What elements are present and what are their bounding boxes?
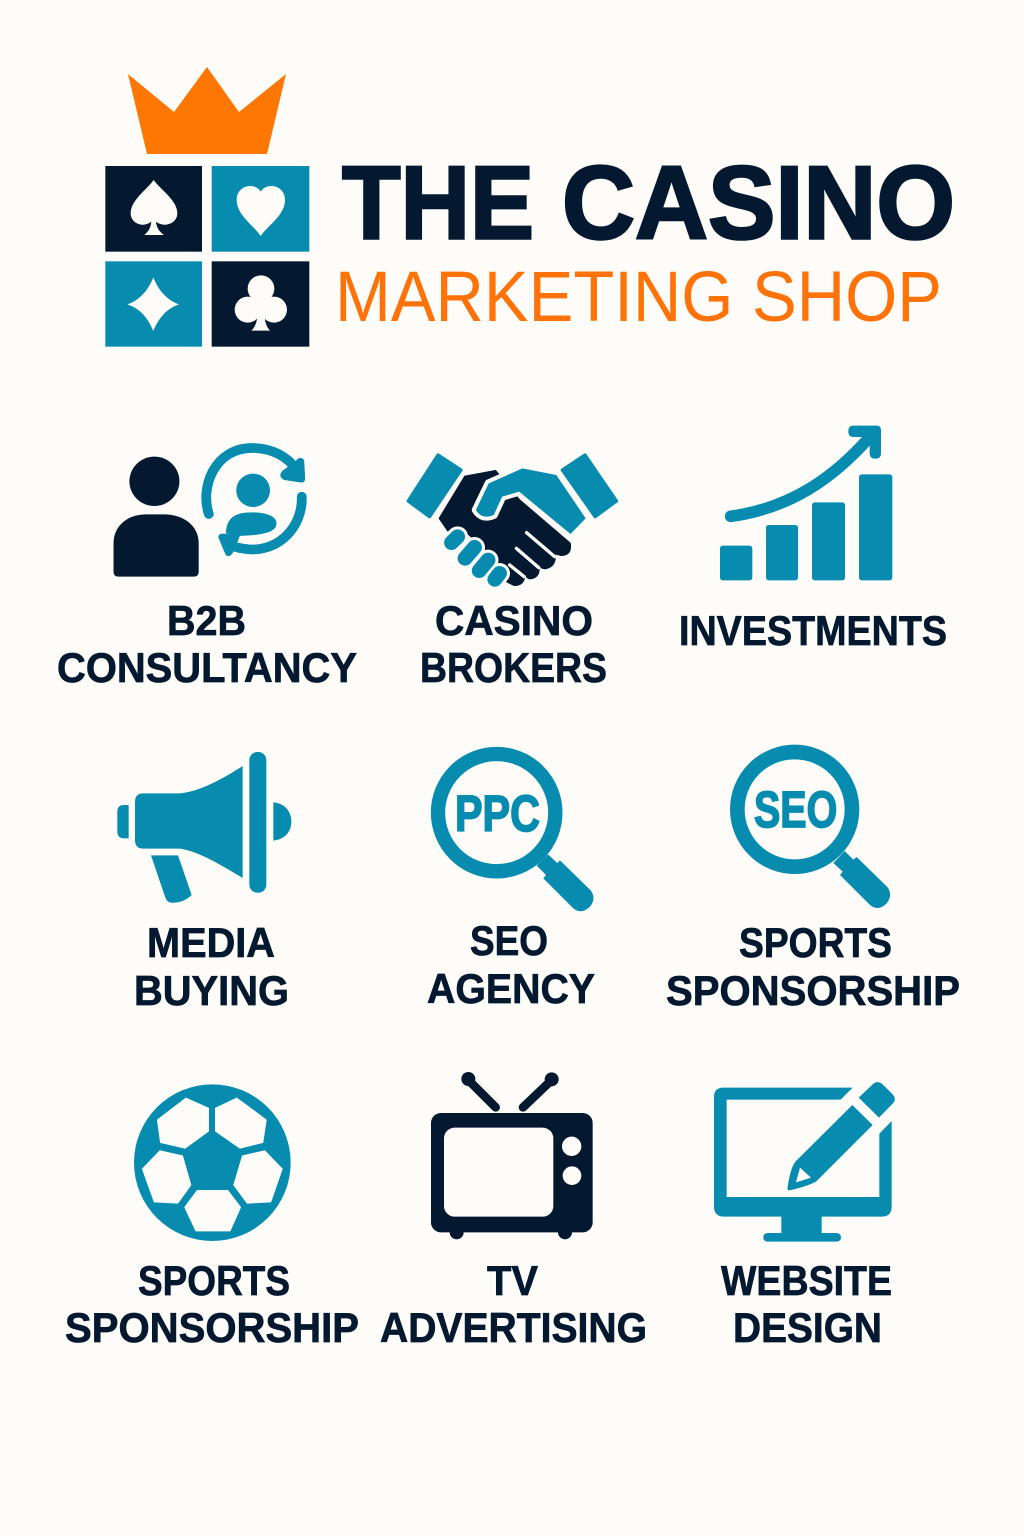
icon: diamond tile: [105, 261, 202, 347]
icon: crown: [128, 67, 286, 154]
panel: sports sponsorship (football): [65, 1084, 359, 1351]
label: MEDIA: [147, 919, 275, 966]
title: THE CASINO: [342, 146, 955, 262]
icon: heart tile: [212, 166, 309, 252]
label: BUYING: [134, 967, 289, 1014]
label: [420, 597, 607, 691]
label: WEBSITE: [721, 1257, 892, 1304]
label: [57, 597, 357, 691]
label: CASINO: [435, 597, 593, 644]
logo: crown and card suits: [105, 67, 309, 347]
subtitle: MARKETING SHOP: MARKETING SHOP: [335, 258, 942, 337]
label: SPONSORSHIP: [65, 1304, 359, 1351]
icon: magnifier SEO: [737, 752, 890, 908]
label: [721, 1257, 892, 1351]
panel: casino brokers: [408, 455, 616, 691]
label: [666, 919, 960, 1014]
icon: magnifier PPC: [438, 754, 594, 911]
icon: growth chart with arrow: [720, 426, 892, 580]
icon: retro television: [431, 1072, 593, 1239]
label: B2B: [167, 597, 246, 644]
label: BROKERS: [420, 644, 607, 691]
label: CONSULTANCY: [57, 644, 357, 691]
label: INVESTMENTS: [679, 607, 947, 654]
icon: person with rotating arrows: [114, 448, 305, 577]
label: [134, 919, 289, 1014]
panel: sports sponsorship (magnifier): [666, 752, 960, 1014]
icon: spade tile: [105, 166, 202, 252]
title: THE CASINO: CASINO: [562, 146, 955, 262]
panel: media buying: [117, 752, 291, 1014]
icon: club tile: [212, 261, 309, 347]
label: AGENCY: [427, 965, 595, 1012]
icon: monitor with pencil: [714, 1082, 895, 1242]
label: SEO: [470, 917, 548, 964]
panel: website design: [714, 1082, 895, 1351]
label: SPONSORSHIP: [666, 967, 960, 1014]
panel: B2B consultancy: [57, 448, 357, 691]
label: TV: [487, 1257, 538, 1304]
label: SPORTS: [739, 919, 892, 966]
panel: TV advertising: [380, 1072, 647, 1351]
icon: magnifier SEO: SEO: [754, 781, 837, 838]
title: THE CASINO: THE: [342, 146, 534, 262]
icon: magnifier PPC: PPC: [455, 785, 540, 842]
label: ADVERTISING: [380, 1304, 647, 1351]
icon: soccer ball: [134, 1084, 291, 1241]
icon: megaphone: [117, 752, 291, 903]
label: [65, 1257, 359, 1351]
label: DESIGN: [733, 1304, 882, 1351]
label: SPORTS: [138, 1257, 290, 1304]
icon: handshake: [408, 455, 616, 585]
label: [427, 917, 595, 1012]
panel: SEO agency: [427, 754, 595, 1012]
label: [380, 1257, 647, 1351]
panel: investments: [679, 426, 947, 654]
